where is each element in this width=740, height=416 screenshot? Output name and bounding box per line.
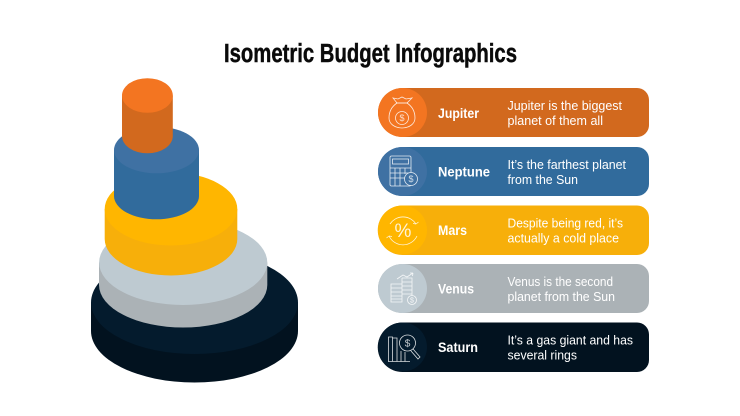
icon: percent cycle — [386, 217, 418, 245]
description: several rings — [508, 348, 577, 362]
icon: coin stacks with growth arrow: $ — [410, 298, 414, 304]
layer: Neptune — [114, 127, 199, 219]
title: Isometric Budget Infographics — [224, 40, 517, 68]
icon: bars with magnifier: $ — [405, 338, 411, 350]
description: It’s a gas giant and has — [508, 334, 633, 348]
isometric stacked cylinder chart — [91, 78, 298, 382]
icon: percent cycle: % — [395, 221, 412, 242]
description: from the Sun — [508, 173, 578, 187]
row: Venus — [378, 264, 649, 313]
row: Jupiter — [378, 88, 649, 137]
description: planet from the Sun — [508, 290, 615, 304]
layer: Saturn — [91, 251, 298, 382]
row: Saturn — [378, 322, 649, 372]
label: Neptune — [438, 164, 490, 180]
label: Jupiter — [438, 106, 480, 121]
icon: money bag — [389, 97, 415, 128]
layer: Mars — [105, 172, 237, 275]
layer: Venus — [99, 220, 267, 328]
label: Mars — [438, 223, 467, 238]
label: Saturn — [438, 340, 478, 355]
label: Venus — [438, 282, 474, 296]
icon: coin stacks with growth arrow — [391, 273, 416, 304]
icon: calculator — [390, 156, 418, 186]
row: Mars — [378, 206, 649, 255]
icon: bars with magnifier — [388, 335, 420, 362]
description: Despite being red, it’s — [508, 216, 623, 230]
description: planet of them all — [508, 114, 603, 128]
description: It’s the farthest planet — [508, 158, 627, 172]
description: actually a cold place — [508, 232, 619, 246]
layer: Jupiter — [122, 78, 173, 153]
row: Neptune — [378, 147, 649, 196]
icon: calculator: $ — [408, 174, 414, 184]
icon: money bag: $ — [399, 113, 405, 123]
description: Venus is the second — [508, 275, 613, 289]
description: Jupiter is the biggest — [508, 99, 623, 113]
